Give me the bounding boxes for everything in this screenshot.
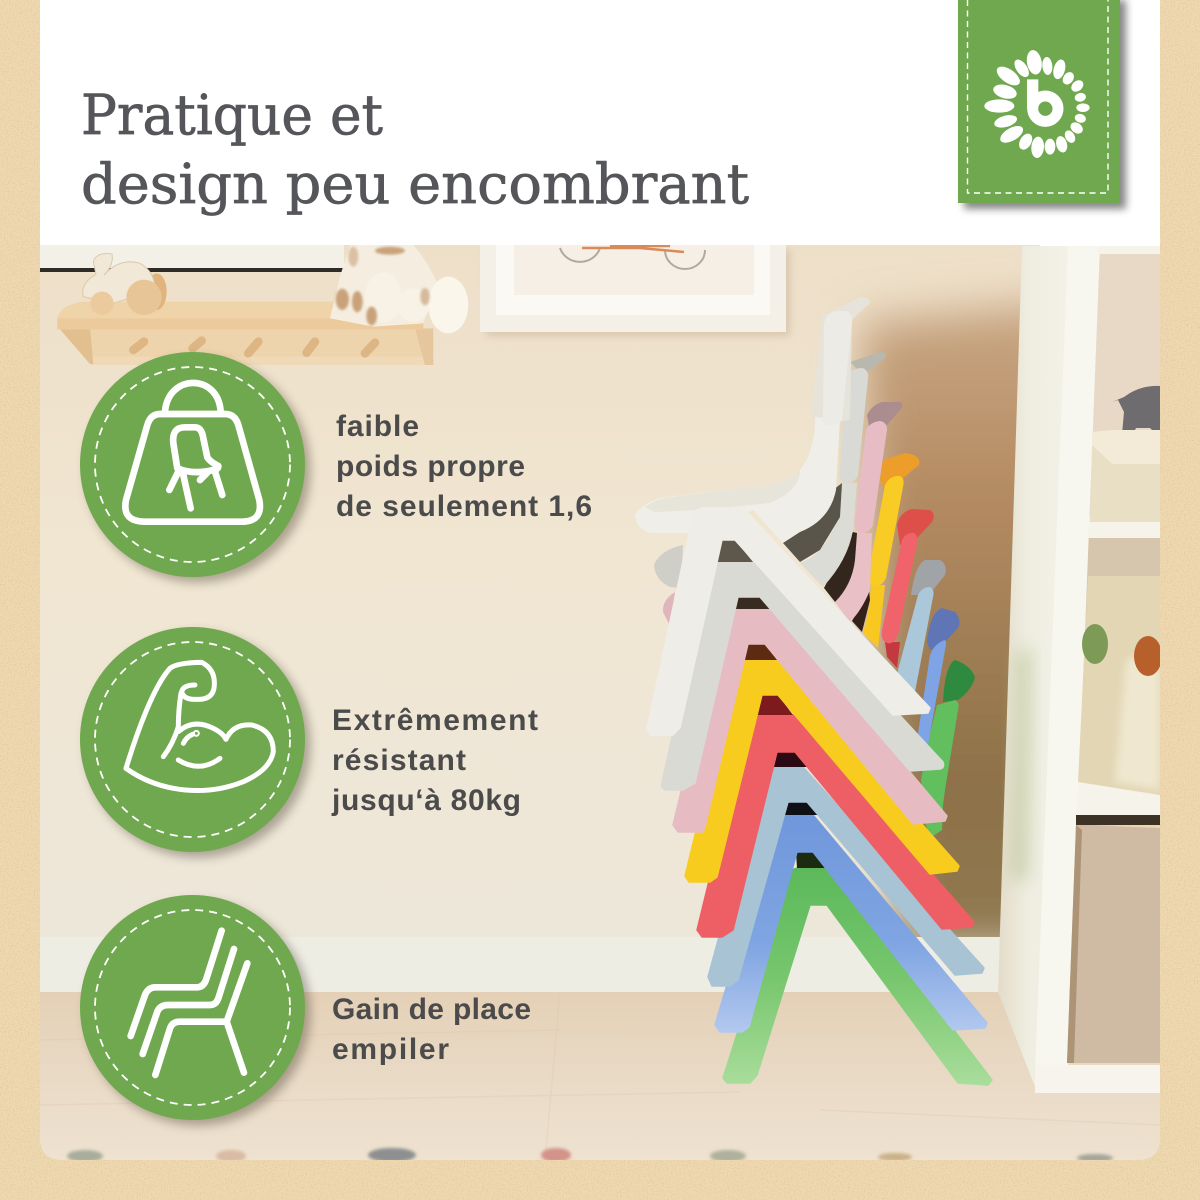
chair: white xyxy=(635,297,930,735)
feature text: strength: Extrêmement xyxy=(332,704,538,737)
chair: green xyxy=(723,660,992,1085)
feature text: stackable xyxy=(332,993,531,1066)
chair: light blue xyxy=(708,560,984,986)
title: design peu encombrant xyxy=(81,152,749,216)
feature text: stackable: Gain de place xyxy=(332,993,531,1026)
rug tufts xyxy=(67,1148,1113,1162)
feature badge: low weight xyxy=(80,352,310,582)
chair: pink xyxy=(663,402,947,832)
feature text: strength: jusqu‘à 80kg xyxy=(331,784,521,817)
feature text: low weight: de seulement 1,6 xyxy=(336,490,592,523)
chair: red xyxy=(697,509,974,937)
feature text: low weight: poids propre xyxy=(336,450,525,483)
feature text: low weight: faible xyxy=(336,410,419,443)
plush toy xyxy=(330,245,468,333)
feature text: strength xyxy=(331,704,538,817)
storage box small xyxy=(1090,430,1160,522)
bookcase front panel xyxy=(1035,246,1100,1070)
toy elephant xyxy=(1112,386,1160,430)
feature text: strength: résistant xyxy=(332,744,466,777)
icon: stacked chairs xyxy=(131,931,247,1075)
baseboard xyxy=(40,937,1010,993)
photo: room scene with stacked chairs xyxy=(40,245,1162,1162)
picture frame center with bicycle xyxy=(480,245,790,336)
wooden wall shelf xyxy=(57,302,433,365)
icon: flexed arm xyxy=(126,662,273,791)
shelf boards xyxy=(1087,514,1160,538)
bookcase interior xyxy=(1085,252,1160,514)
logo: b flower xyxy=(984,49,1090,158)
fabric storage box xyxy=(1067,825,1160,1063)
feature badge: stackable xyxy=(80,895,310,1126)
shelf dark gap xyxy=(1076,815,1160,825)
feature text: low weight xyxy=(336,410,592,523)
bookcase xyxy=(998,246,1162,1093)
bookcase side panel xyxy=(998,246,1070,1092)
feature text: stackable: empiler xyxy=(332,1033,449,1066)
chair: yellow xyxy=(685,453,959,882)
wooden rabbit toy xyxy=(83,254,167,315)
chair: blue xyxy=(715,608,987,1032)
logo tag xyxy=(958,0,1126,209)
picture frame left xyxy=(40,245,344,272)
stacked chairs xyxy=(635,297,992,1085)
title xyxy=(81,83,749,216)
woven basket xyxy=(1078,576,1162,795)
tag stitching xyxy=(968,0,1108,193)
floor xyxy=(40,992,1160,1162)
wall xyxy=(40,245,1040,945)
title: Pratique et xyxy=(81,83,383,147)
chair: gray xyxy=(654,352,944,790)
wall shadow xyxy=(860,300,1080,950)
header panel xyxy=(40,0,1160,246)
icon: weight bag with chair xyxy=(125,383,260,522)
feature badge: strength xyxy=(80,627,310,858)
coat pegs xyxy=(133,341,375,353)
